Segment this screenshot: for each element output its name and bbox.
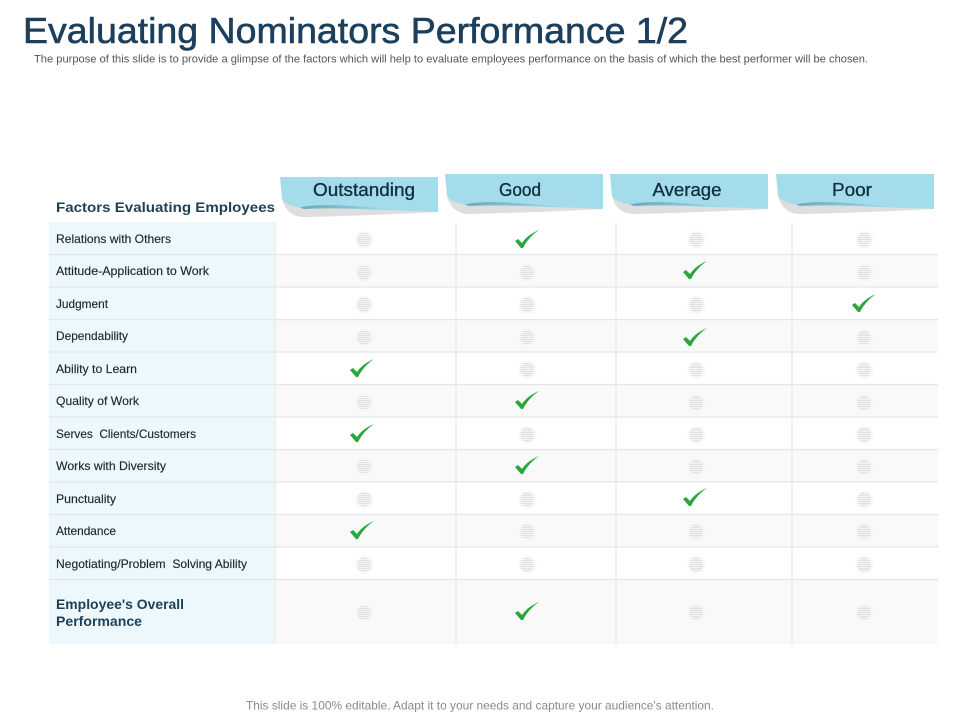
title: Evaluating Nominators Performance 1/2 <box>23 10 688 51</box>
row: Relations with Others <box>56 230 874 250</box>
row: Attendance <box>56 521 874 542</box>
row: Works with Diversity: Works with Diversity <box>56 459 166 473</box>
row: Punctuality: Punctuality <box>56 492 116 506</box>
row: Dependability <box>56 328 874 348</box>
tab: Poor: Poor <box>832 180 872 200</box>
footer note: This slide is 100% editable. Adapt it to your needs and capture your audience's attention. <box>246 698 714 712</box>
row: Quality of Work: Quality of Work <box>56 394 140 408</box>
row: Employee's Overall Performance <box>56 596 874 629</box>
row: Attitude-Application to Work: Attitude-Application to Work <box>56 264 210 278</box>
first column background <box>49 222 274 644</box>
row: Negotiating/Problem Solving Ability: Negotiating/Problem Solving Ability <box>56 557 247 571</box>
row: Ability to Learn <box>56 359 874 380</box>
row: Punctuality <box>56 488 874 510</box>
tab: Good: Good <box>499 180 541 200</box>
header: rating columns <box>280 174 934 217</box>
row: Attendance: Attendance <box>56 524 116 538</box>
row: Quality of Work <box>56 391 874 413</box>
subtitle description: The purpose of this slide is to provide a glimpse of the factors which will help to evaluate employees performance on the basis of which the best performer will be chosen. <box>34 54 868 66</box>
row: Attitude-Application to Work <box>56 261 874 283</box>
tab: Average: Average <box>652 180 722 200</box>
row: Negotiating/Problem Solving Ability <box>56 555 874 575</box>
row: Dependability: Dependability <box>56 329 128 343</box>
row: Serves Clients/Customers <box>56 424 874 445</box>
tab: Poor <box>776 174 934 214</box>
row: Employee's Overall Performance: Performance <box>56 613 142 629</box>
tab: Outstanding <box>280 177 438 217</box>
tab: Good <box>445 174 603 214</box>
row: Judgment <box>56 294 876 315</box>
row: Judgment: Judgment <box>56 297 109 311</box>
tab: Outstanding: Outstanding <box>313 180 415 200</box>
row: Works with Diversity <box>56 456 874 477</box>
row: Relations with Others: Relations with Others <box>56 232 171 246</box>
heading: factors column: Factors Evaluating Employees <box>56 199 275 215</box>
row: Ability to Learn: Ability to Learn <box>56 362 137 376</box>
tab: Average <box>610 174 768 214</box>
row: Employee's Overall Performance: Employee's Overall <box>56 596 184 612</box>
evaluation table <box>49 222 938 644</box>
row: Serves Clients/Customers: Serves Clients/Customers <box>56 427 196 441</box>
